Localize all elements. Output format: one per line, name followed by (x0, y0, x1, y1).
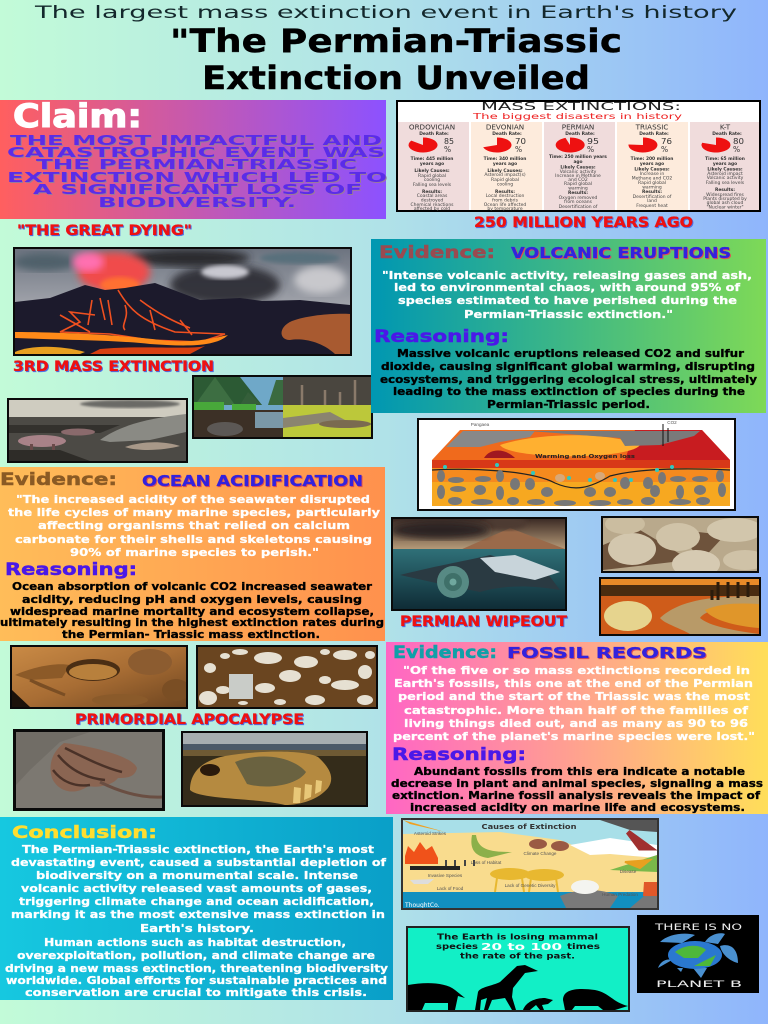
column: ordovician: Coastal areas (417, 193, 448, 199)
column: k-t: 80 (733, 137, 744, 146)
claim text: A SIGNIFICANT LOSS OF (33, 182, 362, 198)
column: k-t: Falling sea levels (706, 180, 745, 186)
illustration: causes of extinction: Lack of Food (437, 886, 464, 891)
evidence quote: affecting organisms that relied on calcium (38, 520, 350, 532)
column: triassic: Death Rate: (639, 131, 669, 137)
column: triassic: Time: 200 million (631, 156, 673, 162)
image: gorgonopsid skull fossil (181, 731, 368, 807)
graphic: there is no planet b: THERE IS NO (653, 923, 742, 933)
reasoning text (380, 348, 757, 411)
column: k-t: "Nuclear winter" (706, 204, 744, 210)
subtitle: The largest mass extinction event in Earth's history (33, 3, 737, 23)
graphic text (436, 932, 601, 960)
column: permian: and CO2 (568, 177, 588, 183)
claim heading: Claim: (13, 97, 142, 135)
column: triassic: Increase in (640, 171, 664, 177)
column: devonian: Death Rate: (492, 131, 522, 137)
column: k-t: Widespread fires (706, 192, 744, 198)
evidence quote: the life cycles of many marine species, particularly (8, 507, 380, 519)
evidence quote (8, 494, 380, 559)
column: k-t: years ago (713, 161, 737, 167)
column: triassic: Frequent heat (636, 203, 668, 209)
conclusion heading: Conclusion: (12, 823, 157, 843)
topic heading: volcanic eruptions: VOLCANIC ERUPTIONS (511, 244, 731, 262)
reasoning heading: Reasoning: (374, 327, 509, 347)
reasoning text: extinction. Marine fossil analysis reveals the impact of (392, 790, 760, 802)
graphic text: species (436, 942, 479, 951)
column: k-t: Likely Causes: (707, 166, 743, 172)
column: permian: ago (573, 160, 583, 165)
reasoning text (391, 766, 763, 814)
claim text: EXTINCTION WHICH LED TO (7, 170, 387, 186)
column: ordovician: affected by cold (414, 206, 450, 212)
column: triassic: Desertification of (633, 194, 672, 200)
label: the great dying: "THE GREAT DYING" (17, 223, 192, 239)
column: ordovician: ORDOVICIAN (409, 122, 455, 132)
column: k-t (702, 122, 747, 210)
column: k-t: Results: (715, 187, 735, 193)
illustration: causes of extinction (401, 818, 659, 910)
column: permian: Volcanic activity (560, 169, 597, 175)
column: ordovician: destroyed (421, 198, 443, 204)
evidence quote: carbonate for their shells and skeletons causing (15, 534, 372, 546)
column: ordovician: Death Rate: (419, 131, 449, 137)
column: permian: Results: (568, 190, 588, 196)
illustration: causes of extinction: Loss of Habitat (471, 860, 502, 865)
column: ordovician: Likely Causes: (414, 168, 450, 174)
reasoning text: widespread marine mortality and ecosystem collapse, (10, 606, 374, 618)
evidence quote: "Of the five or so mass extinctions recorded in (403, 665, 750, 677)
chart: mass extinctions: The biggest disasters in history (471, 112, 683, 121)
evidence quote: "Intense volcanic activity, releasing gases and ash, (382, 270, 752, 282)
reasoning heading: Reasoning: (392, 745, 526, 765)
label: primordial apocalypse: PRIMORDIAL APOCALYPSE (75, 712, 304, 728)
column: ordovician: Rapid global (418, 173, 446, 179)
panel: evidence ocean acidification (0, 467, 385, 641)
column: devonian: years ago (493, 161, 517, 167)
column: triassic: Rapid global (638, 180, 666, 186)
column: devonian: cooling (497, 182, 513, 188)
graphic: earth losing mammal species (406, 926, 630, 1012)
column: triassic: land (647, 198, 657, 204)
panel: conclusion (0, 817, 393, 1000)
illustration: causes of extinction: Climate Change (524, 851, 557, 856)
illustration: causes of extinction: ThoughtCo. (404, 902, 440, 909)
graphic text: 20 to 100 (481, 942, 562, 953)
evidence heading: Evidence: (393, 643, 497, 663)
chart: mass extinctions (396, 100, 761, 212)
image: shark and ammonite below volcano (390, 516, 567, 611)
conclusion text: extinction: devastating event, caused a substantial depletion of (11, 857, 387, 869)
column: permian: Desertification of (559, 204, 598, 210)
column: permian: 95 (587, 137, 599, 146)
conclusion text: human actions: worldwide. Global efforts for sustainable practices and (6, 975, 387, 987)
image: forest before and after (192, 375, 373, 439)
column: ordovician: Results: (422, 189, 442, 195)
conclusion text: extinction: biodiversity on a monumental scale. Intense (36, 870, 358, 882)
column: permian: Likely Causes: (560, 164, 596, 170)
diagram: warming and oxygen loss cross-section (417, 418, 736, 511)
column: permian: Oxygen removed (559, 195, 597, 201)
reasoning text: ultimately resulting in the highest extinction rates during (0, 617, 384, 629)
column: devonian: 70 (515, 137, 526, 146)
column: devonian: Time: 340 million (484, 156, 526, 162)
column: devonian (483, 122, 526, 212)
column: ordovician: Chemical reactions (410, 202, 454, 208)
reasoning text: Ocean absorption of volcanic CO2 increased seawater (12, 581, 373, 593)
evidence quote: Permian-Triassic extinction." (464, 309, 673, 321)
illustration: causes of extinction: Causes of Extinction (482, 822, 576, 831)
evidence quote: living things died out, and as many as 90 to 96 (404, 718, 748, 730)
topic heading: fossil records: FOSSIL RECORDS (507, 644, 707, 662)
evidence quote: "The increased acidity of the seawater disrupted (16, 494, 370, 506)
column: k-t: Death Rate: (712, 131, 742, 137)
illustration: causes of extinction: Disease (620, 869, 637, 874)
title (170, 22, 622, 97)
column: devonian: Local destruction (486, 193, 524, 199)
illustration: causes of extinction: Human Predation (602, 892, 638, 897)
evidence quote: 90% of marine species to perish." (70, 547, 319, 559)
column: ordovician: years ago (420, 161, 444, 167)
reasoning text: leading to the mass extinction of species during the (393, 386, 745, 398)
reasoning text: the Permian- Triassic mass extinction. (62, 629, 320, 641)
column: triassic: Likely Causes: (634, 166, 670, 172)
column: triassic: Methane and CO2 (632, 176, 672, 182)
column: devonian: Rapid global (491, 177, 519, 183)
claim text: THE MOST IMPACTFUL AND (10, 133, 382, 149)
column: permian: Rapid global (564, 181, 592, 187)
column: triassic: warming (642, 184, 662, 190)
column: permian: % (587, 145, 594, 154)
conclusion text: extinction: volcanic activity released vast amounts of gases, (21, 883, 372, 895)
evidence heading: Evidence: (379, 243, 495, 263)
column: triassic: 76 (661, 137, 672, 146)
reasoning text: increased acidity on marine life and ecosystems. (410, 802, 745, 814)
column: triassic: years ago (640, 161, 664, 167)
claim text: BIODIVERSITY. (98, 195, 296, 211)
column: devonian: Results: (495, 189, 515, 195)
conclusion text: human actions: overexploitation, pollution, and climate change are (17, 950, 375, 962)
conclusion text: extinction: The Permian-Triassic extinction, the Earth's most (22, 844, 374, 856)
reasoning text: Abundant fossils from this era indicate a notable (414, 766, 745, 778)
column: ordovician: 85 (444, 137, 454, 146)
column: triassic (628, 122, 673, 209)
column: devonian: Ocean life affected (484, 202, 526, 208)
image: erupting volcano (13, 247, 352, 356)
column: devonian: Likely Causes: (487, 168, 523, 174)
column: k-t: % (733, 145, 740, 154)
panel: claim (0, 97, 387, 219)
column: permian (549, 122, 607, 210)
column: devonian: by temperature (487, 206, 523, 212)
conclusion text: human actions: conservation are crucial to mitigate this crisis. (25, 987, 367, 999)
label: 250 million years ago: 250 MILLION YEARS AGO (474, 215, 693, 231)
image: fossil limestone closeup (601, 514, 767, 578)
claim text: CATASTROPHIC EVENT WAS (7, 145, 385, 161)
reasoning text: decrease in plant and animal species, signaling a mass (391, 778, 763, 790)
column: triassic: Results: (642, 189, 662, 195)
evidence heading: Evidence: (0, 470, 117, 490)
column: devonian: from debris (492, 198, 519, 204)
reasoning text: acidity, reducing pH and oxygen levels, causing (22, 594, 362, 606)
evidence quote: Earth's fossils, this one at the end of the Permian (394, 678, 753, 690)
column: k-t: Plants disrupted by (703, 196, 747, 202)
column: ordovician: % (444, 145, 451, 154)
claim text: THE PERMIAN-TRIASSIC (36, 157, 357, 173)
graphic text: times (567, 942, 601, 951)
evidence quote: period and the start of the Triassic was the most (398, 691, 750, 703)
panel: evidence fossil records (386, 642, 768, 814)
column: devonian: % (515, 145, 522, 154)
reasoning text: Massive volcanic eruptions released CO2 and sulfur (397, 348, 745, 360)
evidence quote (382, 270, 752, 321)
icon: earth turtle (658, 933, 738, 978)
diagram: warming and oxygen loss cross-section: Warming and Oxygen loss (535, 454, 636, 460)
evidence quote (393, 665, 755, 743)
reasoning heading: Reasoning: (5, 560, 137, 580)
column: ordovician: cooling (424, 177, 440, 183)
illustration: causes of extinction: Invasive Species (428, 873, 463, 878)
claim text (7, 133, 387, 211)
conclusion text: extinction (11, 844, 387, 935)
reasoning text: ecosystems, and triggering ecological stress, ultimately (380, 374, 757, 386)
reasoning text (0, 581, 384, 641)
column: k-t: K-T (720, 122, 731, 132)
label: permian wipeout: PERMIAN WIPEOUT (400, 614, 567, 630)
title: Extinction Unveiled (202, 59, 590, 97)
column: permian: Death Rate: (565, 131, 595, 137)
reasoning text: Permian-Triassic period. (487, 399, 650, 411)
diagram: warming and oxygen loss cross-section: CO2 (667, 420, 677, 425)
panel: evidence volcanic eruptions (371, 239, 766, 413)
evidence quote: led to environmental chaos, with around 95% of (394, 282, 741, 294)
reasoning text: dioxide, causing significant global warming, disrupting (381, 361, 755, 373)
column: ordovician: Falling sea levels (413, 182, 452, 188)
illustration: causes of extinction: Lack of Genetic Diversity (505, 883, 556, 888)
graphic text: the rate of the past. (460, 952, 575, 960)
conclusion text: extinction: Earth's history. (140, 923, 254, 935)
column: permian: from oceans (564, 199, 593, 205)
conclusion text: extinction: marking it as the most extensive mass extinction in (11, 909, 385, 921)
illustration: causes of extinction: Asteroid Strikes (414, 831, 447, 836)
image: shell rubble (196, 645, 378, 709)
graphic: there is no planet b (637, 915, 759, 993)
column: k-t: Volcanic activity (707, 175, 744, 181)
column: triassic: TRIASSIC (635, 122, 668, 132)
graphic: there is no planet b: PLANET B (656, 980, 742, 990)
evidence quote: catastrophic. More than half of the families of (404, 705, 749, 717)
conclusion text: extinction: triggering climate change and ocean acidification, (19, 896, 374, 908)
evidence quote: percent of the planet's marine species were lost." (393, 731, 755, 743)
column: k-t: global ash cloud (707, 200, 744, 206)
image: orange landscape with shell lens (599, 577, 761, 636)
silhouettes: elephant, giraffe, monkey, rhino (408, 965, 628, 1010)
column: ordovician (409, 122, 455, 212)
label: 3rd mass extinction: 3RD MASS EXTINCTION (13, 359, 214, 375)
evidence quote: species estimated to have perished during the (398, 295, 737, 307)
graphic text: The Earth is losing mammal (437, 932, 598, 942)
column: k-t: Time: 65 million (705, 156, 745, 162)
column: ordovician: Time: 445 million (411, 156, 453, 162)
column: devonian: DEVONIAN (486, 122, 524, 132)
conclusion text: human actions (5, 937, 388, 999)
column: k-t: Asteroid impact (707, 171, 743, 177)
column: permian: warming (568, 186, 588, 192)
column: permian: Time: 250 million years (549, 154, 607, 160)
conclusion text: human actions: driving a new mass extinction, threatening biodiversity (5, 963, 388, 975)
image: permian reptiles on ash plain (7, 398, 188, 463)
column: permian: Increase in Methane (555, 173, 601, 179)
title: "The Permian-Triassic (170, 22, 622, 60)
conclusion text: human actions: Human actions such as habitat destruction, (44, 937, 346, 949)
topic heading: ocean acidification: OCEAN ACIDIFICATION (142, 472, 363, 490)
image: trilobite fossils (10, 645, 190, 709)
column: devonian: Asteroid impact(s) (484, 172, 526, 178)
column: permian: PERMIAN (562, 122, 594, 132)
diagram: warming and oxygen loss cross-section: Pangaea (471, 422, 490, 427)
image: crinoid fossil (13, 729, 165, 811)
chart: mass extinctions: MASS EXTINCTIONS: (481, 100, 681, 113)
column: triassic: % (661, 145, 668, 154)
